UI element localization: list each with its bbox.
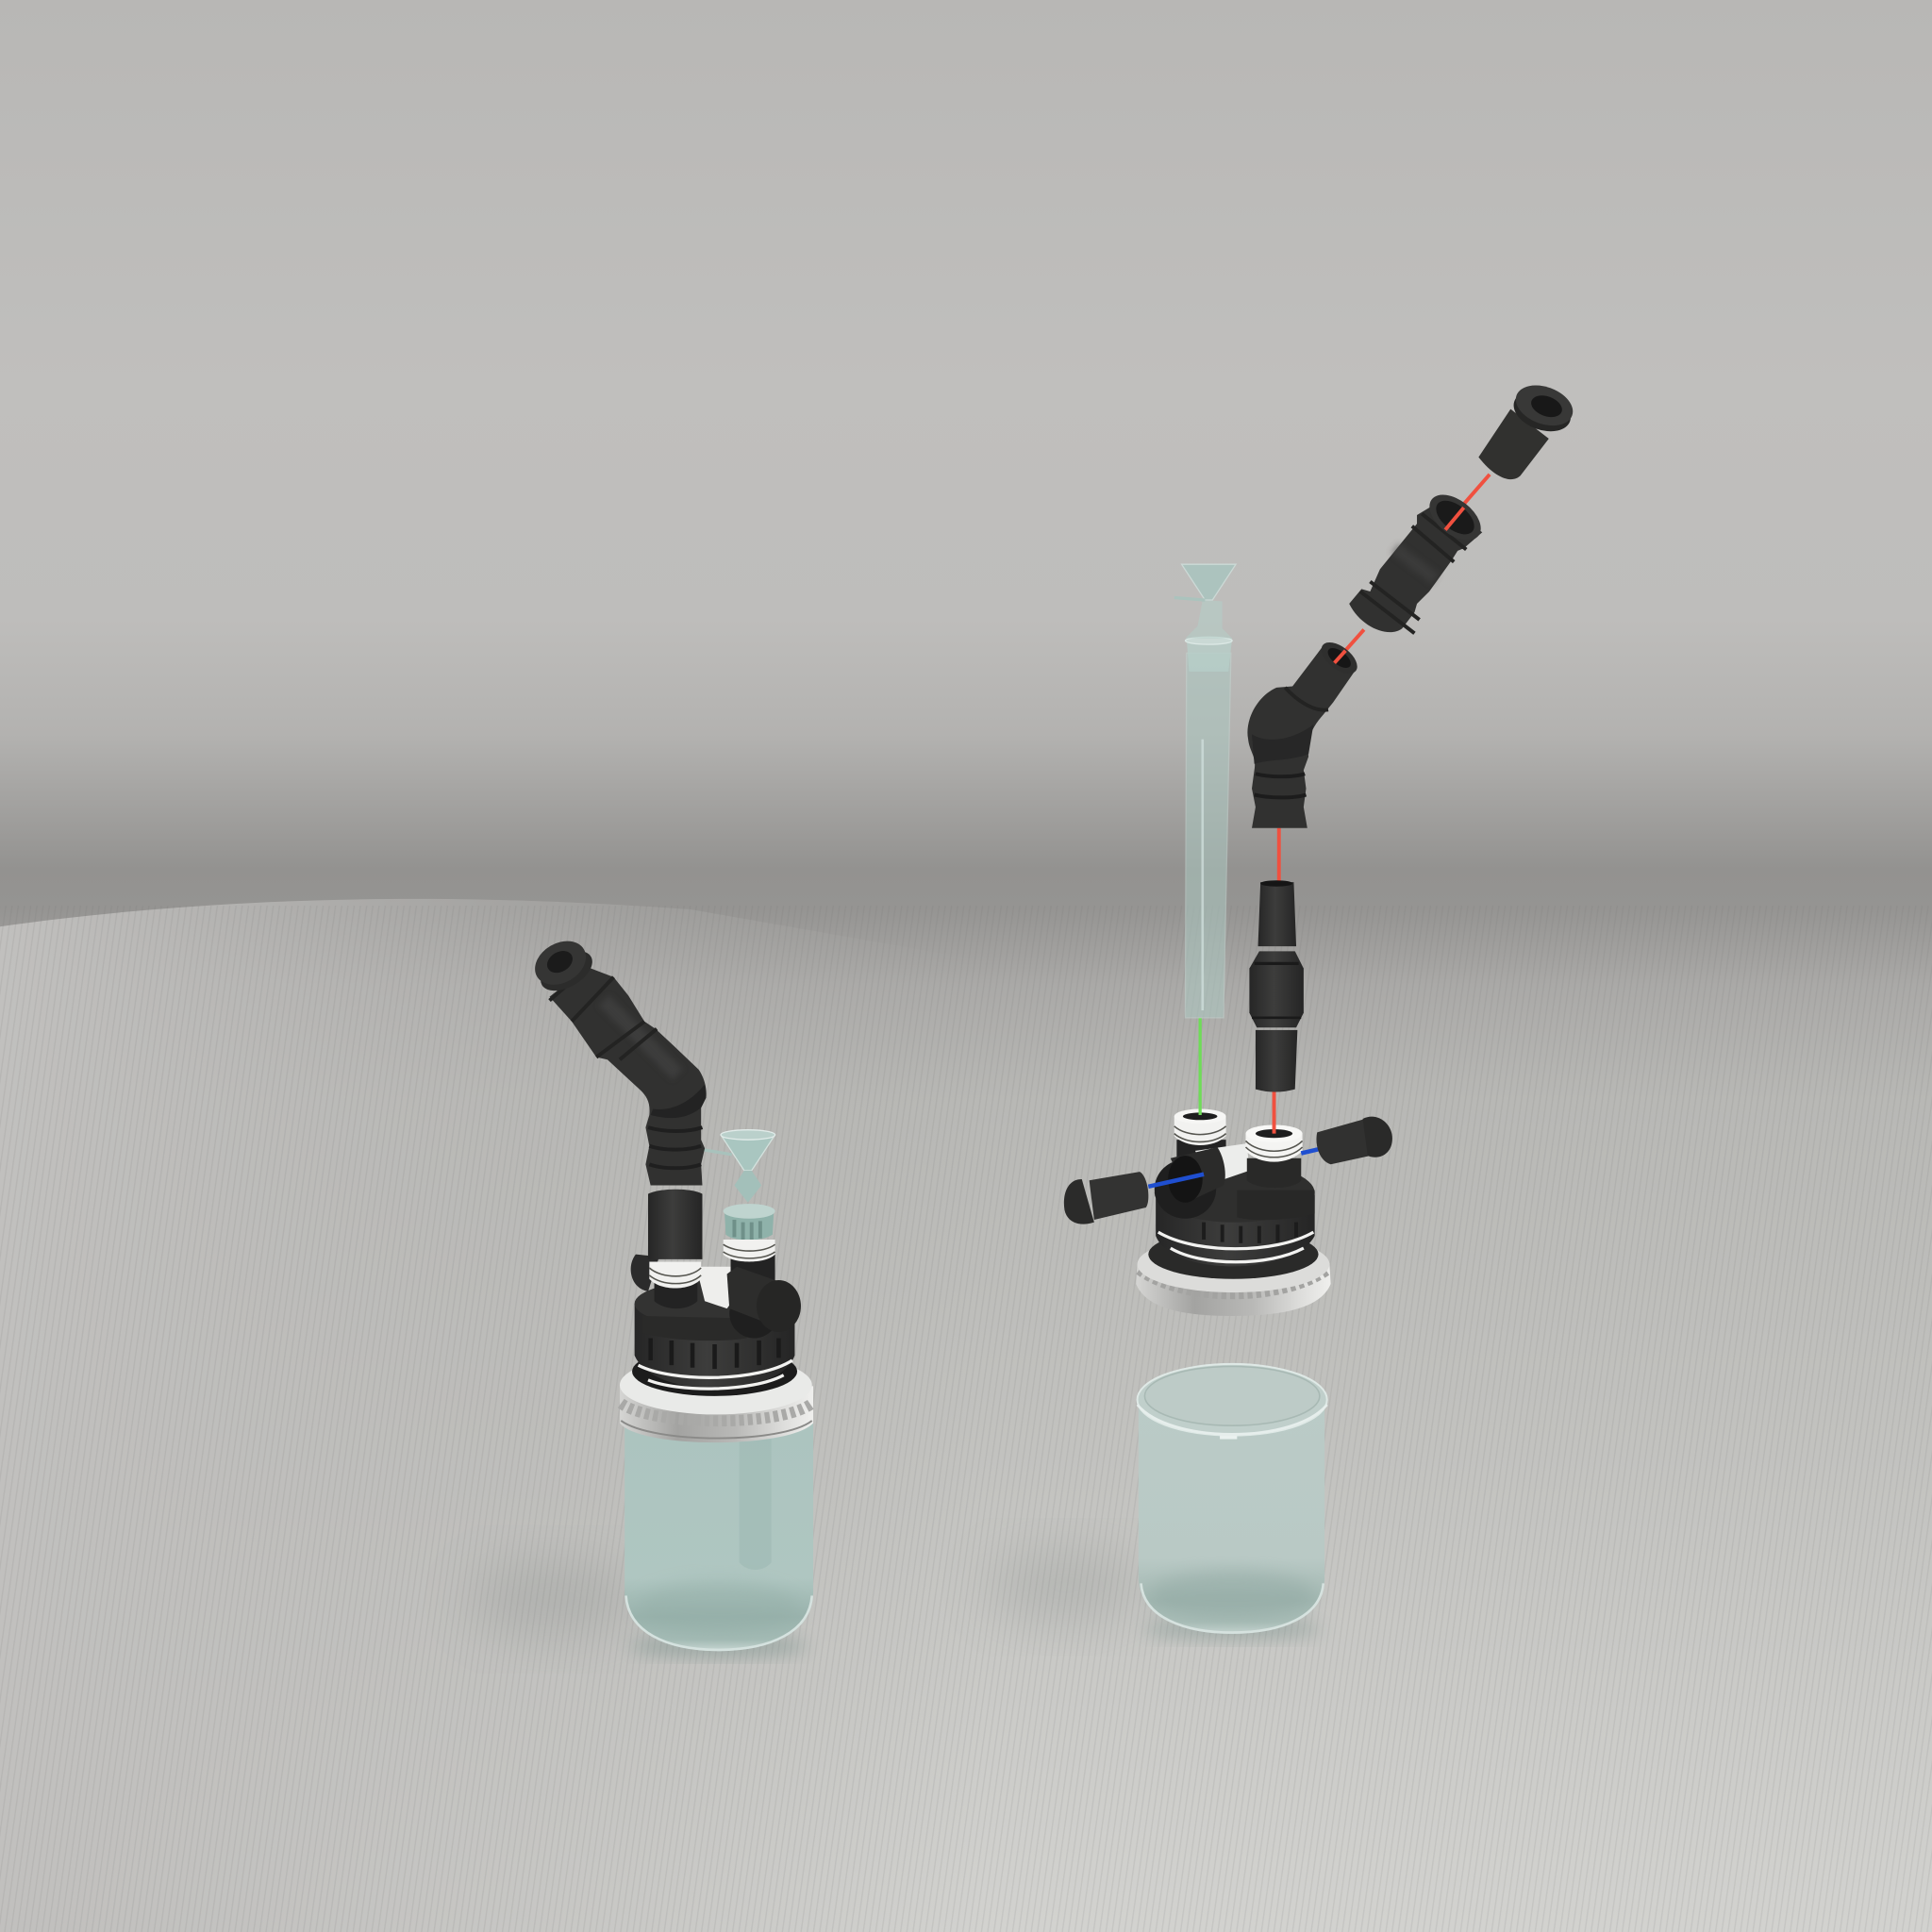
ribbed bent pipe bbox=[550, 967, 707, 1185]
green axis line bbox=[1199, 1018, 1201, 1115]
blue axis lines bbox=[1148, 1146, 1333, 1187]
right side plug bbox=[1316, 1117, 1392, 1164]
floor shadows bbox=[468, 1553, 1321, 1657]
metal lid (exploded) bbox=[1136, 1230, 1331, 1316]
glass jar (assembled) bbox=[625, 1424, 813, 1651]
elbow section bbox=[1247, 637, 1362, 828]
black cap bbox=[632, 1280, 797, 1396]
mouthpiece stem bbox=[527, 931, 707, 1308]
top mouthpiece bbox=[1478, 378, 1578, 479]
red axis lines bbox=[1274, 475, 1490, 1134]
lower stem sleeve bbox=[648, 1190, 702, 1259]
rear port with rings bbox=[1174, 1109, 1226, 1174]
metal lid bbox=[620, 1356, 813, 1442]
side port with opening bbox=[1155, 1147, 1225, 1219]
front side tube with plug bbox=[727, 1267, 801, 1338]
assembled unit bbox=[527, 931, 813, 1651]
lower stem section bbox=[1249, 880, 1304, 1092]
glass bowl assembled bbox=[702, 1130, 775, 1241]
rear side plug bbox=[631, 1255, 659, 1291]
main port rings bbox=[649, 1261, 701, 1289]
glass jar (exploded) bbox=[1138, 1364, 1327, 1634]
glass stem and bowl bbox=[1174, 564, 1236, 1018]
middle section bbox=[1349, 486, 1489, 633]
white connector (exploded) bbox=[1195, 1143, 1249, 1183]
exploded unit bbox=[1064, 378, 1578, 1634]
mouth opening bbox=[527, 931, 599, 999]
white connector bbox=[696, 1267, 747, 1308]
inner down-stem bbox=[740, 1440, 772, 1570]
left side plug bbox=[1064, 1172, 1148, 1224]
bowl port with white rings bbox=[724, 1240, 775, 1291]
front port with rings bbox=[1245, 1124, 1303, 1188]
black cap (exploded) bbox=[1155, 1163, 1315, 1266]
